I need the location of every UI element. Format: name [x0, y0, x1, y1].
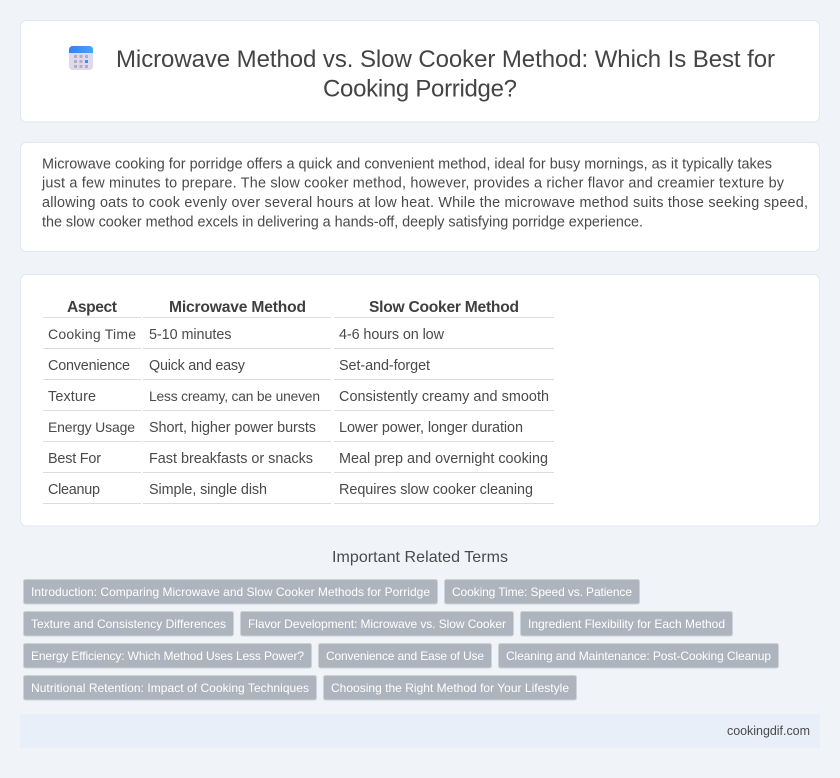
text block: summary: the slow cooker method excels in delivering a hands-off, deeply satisfying porridge experience.: [42, 215, 643, 231]
title: [116, 46, 775, 102]
text block: summary: [41, 156, 808, 231]
tag: cooking time: [444, 580, 640, 604]
tag: texture: Texture and Consistency Differences: [31, 617, 226, 631]
row: energy usage: Lower power, longer duration: [339, 420, 523, 436]
tag: flavor: [240, 612, 514, 636]
row: cleanup: Requires slow cooker cleaning: [339, 482, 533, 498]
row: cooking time: 5-10 minutes: [149, 327, 232, 343]
row: best for: Meal prep and overnight cooking: [339, 451, 548, 467]
tag: lifestyle: [324, 676, 576, 700]
tag: ingredient: [520, 612, 732, 636]
row: cooking time: Cooking Time: [48, 326, 136, 342]
tag: lifestyle: Choosing the Right Method for Your Lifestyle: [331, 681, 569, 695]
tag: ingredient: Ingredient Flexibility for Each Method: [528, 617, 725, 631]
row: cleanup: [48, 482, 533, 498]
heading: related terms: Important Related Terms: [332, 549, 508, 566]
title: Microwave Method vs. Slow Cooker Method: Which Is Best for: [116, 46, 775, 73]
row: cooking time: [48, 326, 445, 343]
tag: energy: [24, 644, 312, 668]
row: energy usage: [48, 419, 523, 436]
tag: texture: [24, 612, 234, 636]
row: convenience: Set-and-forget: [339, 358, 430, 374]
table header: Slow Cooker Method: [369, 299, 519, 316]
row: convenience: Quick and easy: [149, 358, 246, 374]
text block: summary: just a few minutes to prepare. The slow cooker method, however, provides a richer flavor and creamier texture by: [41, 176, 785, 192]
icon: calendar: [69, 46, 93, 70]
panel: header card: [20, 20, 820, 122]
panel: summary paragraph: [20, 142, 820, 252]
row: best for: Fast breakfasts or snacks: [149, 451, 313, 467]
table header: Microwave Method: [169, 299, 306, 316]
table header: [67, 299, 519, 316]
row: best for: Best For: [48, 451, 101, 467]
footer: source: cookingdif.com: [727, 724, 810, 738]
tag: nutrition: [24, 676, 316, 700]
tag: cleaning: Cleaning and Maintenance: Post-Cooking Cleanup: [506, 649, 771, 663]
row: best for: [48, 451, 548, 467]
tag: cleaning: [498, 644, 778, 668]
tag: cooking time: Cooking Time: Speed vs. Patience: [452, 585, 632, 599]
row: texture: [48, 389, 549, 405]
row: cleanup: Cleanup: [48, 482, 100, 498]
row: cleanup: Simple, single dish: [149, 482, 267, 498]
text block: summary: allowing oats to cook evenly over several hours at low heat. While the microwave method suits those seeking speed,: [42, 195, 808, 211]
row: texture: Less creamy, can be uneven: [149, 389, 320, 404]
tag: nutrition: Nutritional Retention: Impact of Cooking Techniques: [31, 681, 309, 695]
row: energy usage: Energy Usage: [48, 419, 135, 435]
tag: convenience: Convenience and Ease of Use: [326, 649, 484, 663]
row: texture: Consistently creamy and smooth: [339, 389, 549, 405]
tag: convenience: [318, 644, 492, 668]
tag: introduction: Introduction: Comparing Microwave and Slow Cooker Methods for Porridge: [31, 585, 430, 599]
row: energy usage: Short, higher power bursts: [149, 420, 316, 436]
panel: comparison table: [20, 274, 820, 526]
row: convenience: [48, 358, 430, 374]
row: texture: Texture: [48, 389, 96, 405]
footer bar: [20, 714, 820, 748]
tag: flavor: Flavor Development: Microwave vs. Slow Cooker: [248, 617, 506, 631]
title: Cooking Porridge?: [323, 76, 517, 102]
table header: Aspect: [67, 299, 117, 316]
tag: introduction: [24, 580, 438, 604]
tag: energy: Energy Efficiency: Which Method Uses Less Power?: [31, 649, 304, 663]
tag list: related terms: [24, 580, 778, 700]
row: convenience: Convenience: [48, 358, 130, 374]
table rules: [43, 318, 554, 504]
row: cooking time: 4-6 hours on low: [339, 327, 445, 343]
text block: summary: Microwave cooking for porridge offers a quick and convenient method, ideal for busy mornings, as it typically takes: [42, 156, 772, 172]
